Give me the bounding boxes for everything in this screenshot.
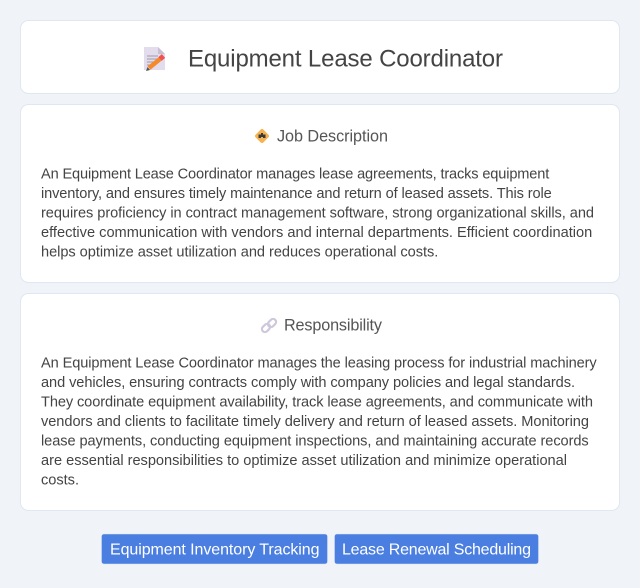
text block: job description: requires proficiency in contract management software, strong organizational skills, and: [41, 206, 594, 222]
text block: responsibility: An Equipment Lease Coordinator manages the leasing process for industrial machinery: [41, 356, 597, 372]
text block: job description: effective communication with vendors and internal departments. Efficient coordination: [41, 225, 592, 241]
heading: responsibility: Responsibility: [284, 316, 383, 334]
text block: responsibility: They coordinate equipment availability, track lease agreements, and communicate with: [41, 394, 593, 410]
text block: job description: inventory, and ensures timely maintenance and return of leased assets. This role: [41, 186, 552, 202]
tag: lease renewal scheduling: Lease Renewal Scheduling: [342, 542, 531, 558]
icon: chain link: [261, 318, 277, 333]
icon: orange diamond with puzzle: [254, 128, 270, 144]
text block: responsibility: costs.: [41, 472, 79, 488]
text block: responsibility: vendors and clients to facilitate timely delivery and return of leased assets. Monitoring: [41, 414, 589, 430]
title text: Equipment Lease Coordinator: [188, 46, 503, 72]
icon: document with pencil: [144, 47, 165, 71]
text block: responsibility: and vehicles, ensuring contracts comply with company policies and legal standards.: [41, 375, 575, 391]
text block: job description: An Equipment Lease Coordinator manages lease agreements, tracks equipment: [41, 166, 549, 182]
tag: lease renewal scheduling: [334, 534, 538, 564]
panel: responsibility: [20, 294, 620, 510]
text block: responsibility: [41, 356, 597, 488]
text block: responsibility: are essential responsibilities to optimize asset utilization and minimize operational: [41, 453, 567, 469]
text block: responsibility: lease payments, conducting equipment inspections, and maintaining accurate records: [41, 434, 589, 450]
text block: job description: [41, 166, 594, 260]
tag: equipment inventory tracking: Equipment Inventory Tracking: [110, 542, 320, 558]
text block: job description: helps optimize asset utilization and reduces operational costs.: [41, 244, 438, 260]
panel: job description: [20, 104, 620, 282]
panel: title: [20, 20, 620, 94]
tag: equipment inventory tracking: [102, 534, 328, 564]
heading: job description: Job Description: [277, 128, 388, 146]
